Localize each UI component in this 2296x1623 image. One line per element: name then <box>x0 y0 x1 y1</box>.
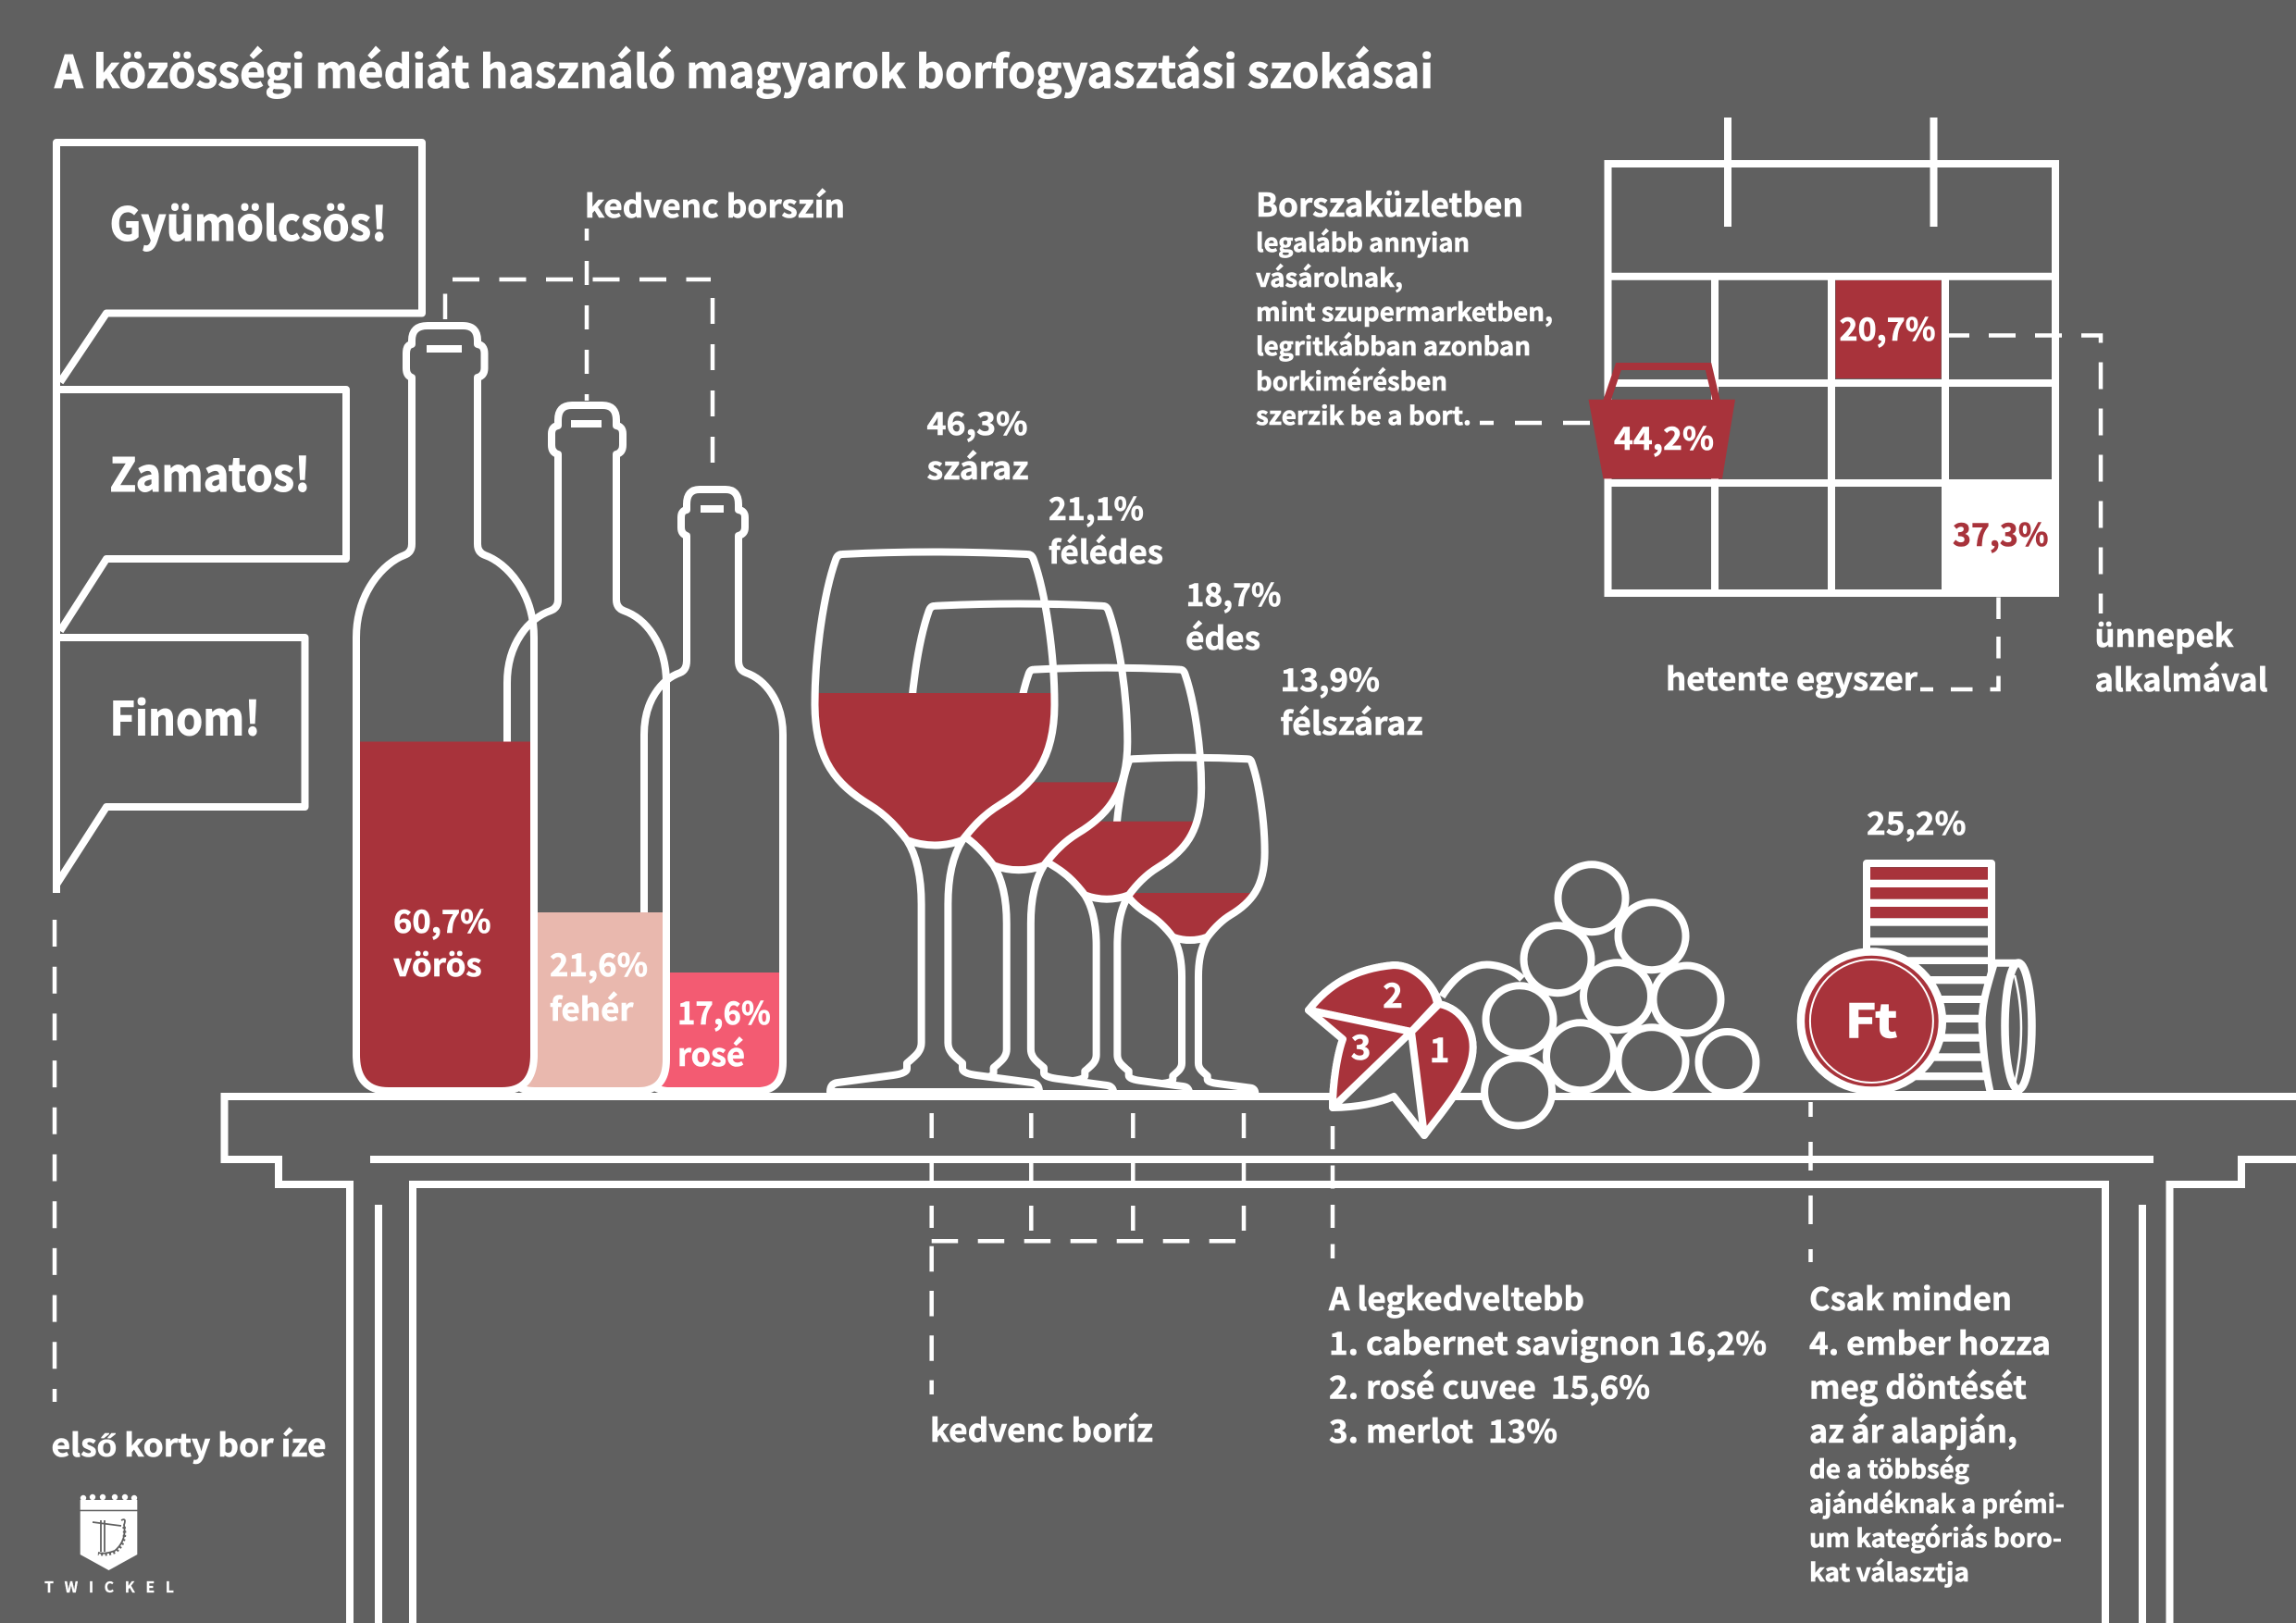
bottle: white 21,6% <box>507 405 666 1091</box>
glass: félédes 21,1% <box>901 604 1136 1094</box>
icon: grape bunch <box>1484 864 1756 1125</box>
text: wine shop: borkimérésben <box>1256 362 1447 398</box>
text: price decision: 4. ember hozza <box>1809 1319 2051 1364</box>
dashed connector: grape varieties <box>1331 1126 1334 1258</box>
text: price decision: kat választja <box>1809 1553 1969 1589</box>
glass label: száraz: száraz <box>927 443 1029 489</box>
glass label: félszáraz: 13,9% <box>1281 655 1380 700</box>
glass label: félszáraz: félszáraz <box>1281 699 1423 744</box>
glass label: félédes: félédes <box>1049 527 1163 573</box>
rank numbers: 1 <box>1430 1022 1449 1072</box>
icon: shopping basket 44,2% <box>1588 366 1735 478</box>
text: favourite grapes: A legkedveltebb <box>1328 1274 1584 1319</box>
table <box>224 1096 2296 1623</box>
text: price decision: um kategóriás boro- <box>1809 1518 2062 1555</box>
coin stack: separators <box>1867 880 1992 1080</box>
table edge over grapes <box>1555 1093 1795 1100</box>
text: wine shop: legalább annyian <box>1256 223 1470 259</box>
text: favourite grapes <box>1328 1274 1767 1452</box>
label: weekly: hetente egyszer <box>1666 654 1917 700</box>
glass: félszáraz 13,9% <box>1110 758 1271 1094</box>
bubble text: Gyümölcsös: Gyümölcsös! <box>109 188 387 254</box>
bubble text: Finom: Finom! <box>109 683 261 750</box>
logo: Twickel <box>44 1494 174 1597</box>
bottle: rosé 17,6% <box>644 489 783 1091</box>
bottle label: rosé <box>677 988 771 1075</box>
text: favourite grapes: 2. rosé cuvee 15,6% <box>1329 1362 1650 1408</box>
icon: calendar <box>1608 118 2059 597</box>
dashed connector: wine colour <box>445 229 713 463</box>
text: favourite grapes: 3. merlot 13% <box>1329 1406 1558 1452</box>
leaf lobe 1 <box>1411 1004 1473 1135</box>
dashed connector: price <box>1808 1102 1813 1262</box>
glass label: édes: 18,7% <box>1186 570 1281 615</box>
glass: száraz 46,3% <box>805 551 1064 1092</box>
label: first sip taste: első korty bor íze <box>52 1420 326 1466</box>
title: A közösségi médiát használó magyarok borfogyasztási szokásai <box>54 36 1433 101</box>
text: price decision <box>1809 1274 2065 1589</box>
text: price decision: ajándéknak a prémi- <box>1809 1484 2065 1520</box>
label: holidays <box>2095 611 2267 700</box>
glass label: édes <box>1185 570 1281 659</box>
label: favourite taste: kedvenc boríz <box>930 1406 1153 1451</box>
rank numbers <box>1351 968 1449 1072</box>
coin stack: red bars <box>1870 867 1988 918</box>
icon: forint coin: Ft <box>1845 985 1897 1051</box>
text: price decision: az ár alapján, <box>1809 1406 2017 1452</box>
icon: rolling coin <box>1982 962 2032 1094</box>
text: price decision: de a többség <box>1809 1450 1969 1486</box>
bottle label: fehér: 21,6% <box>550 940 648 985</box>
logo: Twickel: TWICKEL <box>44 1575 174 1597</box>
bottle label: vörös <box>393 897 490 985</box>
dashed connector: wine shop <box>1480 421 1590 425</box>
label: 25,2%: 25,2% <box>1867 799 1966 844</box>
glass label: száraz: 46,3% <box>927 399 1027 444</box>
glass label: száraz <box>927 399 1029 489</box>
glass label: félszáraz <box>1281 655 1423 744</box>
text: wine shop: Borszaküzletben <box>1256 180 1523 227</box>
text: wine shop <box>1256 180 1553 432</box>
icon: forint coin <box>1801 951 1942 1090</box>
glass label: félédes: 21,1% <box>1049 484 1144 529</box>
text: wine shop: szerzik be a bort. <box>1256 396 1471 432</box>
icon: grape stem <box>1442 964 1522 997</box>
text: wine shop: vásárolnak, <box>1256 258 1403 294</box>
dashed connector: holidays <box>1949 335 2101 613</box>
glass label: édes: édes <box>1185 613 1260 659</box>
text: favourite grapes: 1. cabernet savignon 16,2% <box>1329 1319 1767 1364</box>
label: holidays: ünnepek <box>2095 611 2234 656</box>
calendar cell: ünnepek 20,7% <box>1836 280 1942 378</box>
rank numbers: 3 <box>1351 1020 1371 1070</box>
rank numbers: 2 <box>1383 968 1403 1018</box>
calendar grid <box>1608 118 2055 593</box>
dashed connector: first sip <box>53 920 56 1402</box>
calendar value: 37,3%: 37,3% <box>1953 510 2049 555</box>
calendar value: 20,7%: 20,7% <box>1840 304 1936 350</box>
table edge over coins <box>1851 1093 2054 1100</box>
glass label: félédes <box>1049 484 1163 573</box>
bubble text: Zamatos: Zamatos! <box>109 439 311 505</box>
leaf lobe 2 <box>1309 965 1437 1032</box>
bottle label: vörös: 60,7% <box>393 897 490 942</box>
bottle label: rosé: 17,6% <box>677 988 771 1034</box>
speech bubbles: first sip taste <box>56 142 422 893</box>
calendar cell: hetente 37,3% <box>1942 479 2059 597</box>
bottle label: vörös: vörös <box>393 940 482 985</box>
leaf lobe 3 <box>1309 1010 1411 1108</box>
text: price decision: Csak minden <box>1809 1274 2012 1319</box>
label: favourite wine colour: kedvenc borszín <box>585 181 845 227</box>
dashed connector: weekly <box>1920 598 1999 689</box>
icon: shopping basket 44,2%: 44,2% <box>1614 414 1714 459</box>
text: price decision: meg döntését <box>1809 1362 2027 1408</box>
bottle label: fehér <box>550 940 648 1030</box>
dashed connector: favourite sweetness <box>932 1113 1244 1394</box>
bottle label: fehér: fehér <box>550 985 634 1030</box>
text: wine shop: mint szupermarketben, <box>1256 292 1553 328</box>
label: holidays: alkalmával <box>2095 655 2267 700</box>
glass: édes 18,7% <box>1005 668 1209 1094</box>
bottle label: rosé: rosé <box>677 1030 745 1075</box>
text: wine shop: legritkábban azonban <box>1256 327 1531 363</box>
icon: coin stack <box>1867 863 1992 1095</box>
bottle: red 60,7% <box>356 326 534 1091</box>
icon: leaf with top three grape rank <box>1309 965 1473 1135</box>
